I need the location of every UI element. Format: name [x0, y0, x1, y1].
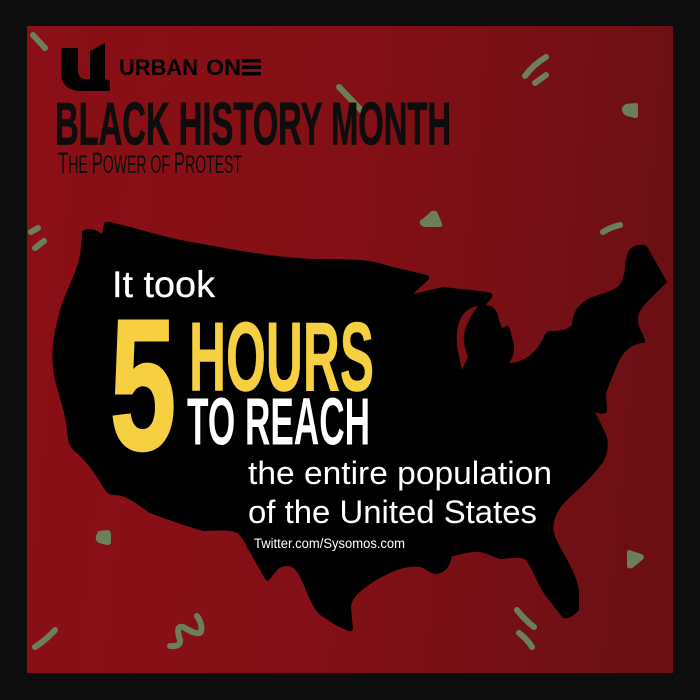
logo wordmark bars	[242, 59, 261, 76]
logo mark	[61, 43, 110, 91]
text: of the United States: of the United States	[248, 494, 537, 530]
number 5: 5	[110, 282, 176, 489]
text: to reach: TO REACH	[187, 384, 370, 460]
logo: Urban One	[61, 43, 261, 91]
logo wordmark: URBAN	[119, 55, 198, 80]
source: Twitter.com/Sysomos.com	[254, 536, 405, 551]
text: hours: HOURS	[189, 302, 374, 412]
text: the entire population: the entire population	[248, 455, 552, 491]
subtitle: THE POWER OF PROTEST	[58, 147, 242, 180]
map of the United States	[52, 222, 667, 631]
confetti marks	[31, 35, 620, 647]
logo wordmark second word: ON	[206, 55, 241, 80]
text: it took: It took	[112, 264, 216, 305]
confetti blobs	[97, 104, 643, 567]
